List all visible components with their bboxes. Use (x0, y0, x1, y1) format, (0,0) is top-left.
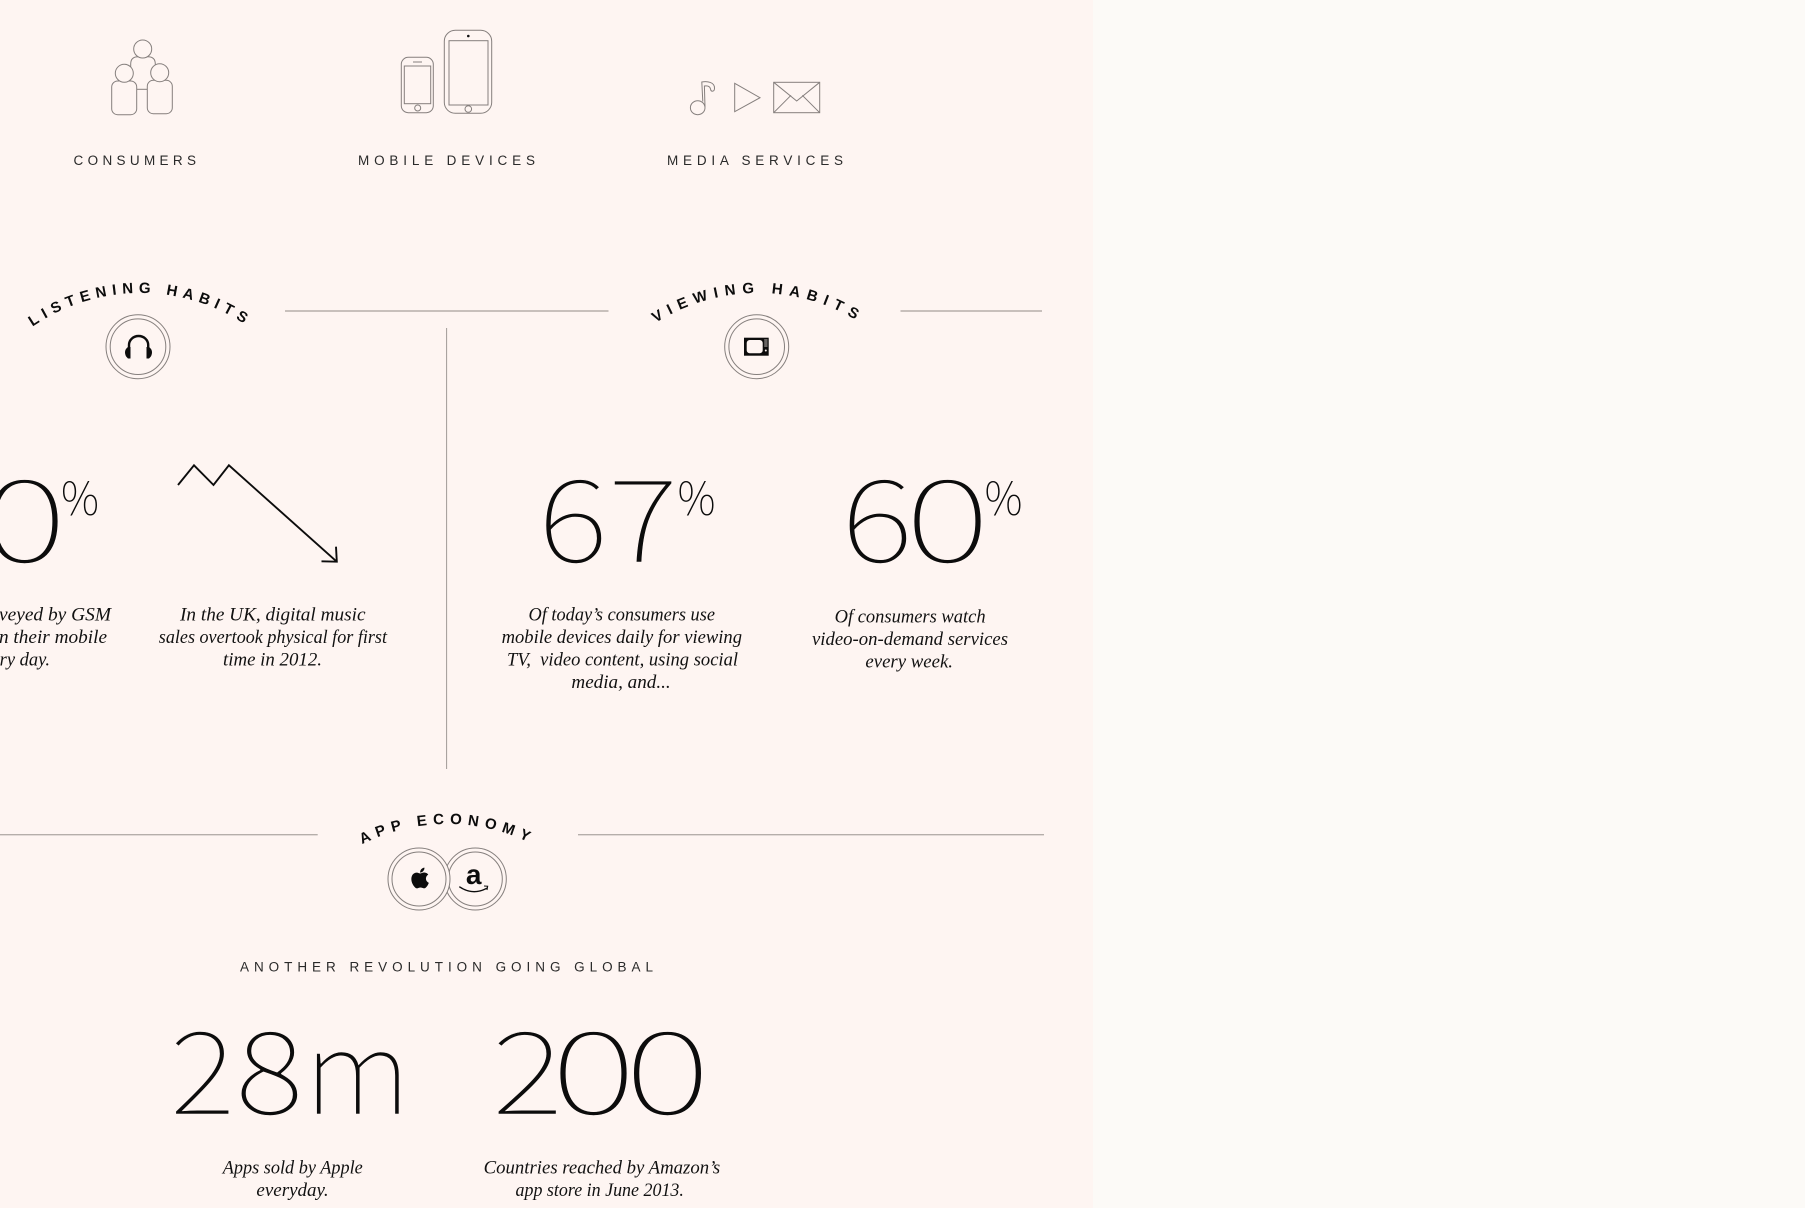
media services column (667, 82, 843, 168)
text: amazon app store description: Countries reached by Amazon’s (484, 1158, 720, 1178)
text: cropped GSM survey description: ry day. (0, 650, 50, 670)
text: apple apps description: Apps sold by Apple (221, 1158, 363, 1178)
stat: 200 countries (492, 982, 710, 1148)
icon: headphones badge (106, 315, 170, 379)
text: apple apps description (221, 1158, 363, 1201)
stat: 28m apps (170, 982, 411, 1148)
panel: right blank margin (1093, 0, 1805, 1208)
heading: app economy: APP ECONOMY (362, 814, 532, 844)
stat: 67 percent (538, 430, 716, 596)
text: UK digital music description: time in 2012. (223, 650, 322, 670)
stat: 60 percent (841, 430, 1022, 596)
stat: 200 countries: 0 (624, 982, 710, 1148)
text: daily mobile use description: TV, video content, using social (507, 650, 738, 670)
text: daily mobile use description (502, 606, 742, 693)
divider: listening to viewing (285, 310, 608, 312)
consumers column (74, 40, 196, 168)
text: daily mobile use description: Of today’s consumers use (528, 606, 715, 626)
section: listening habits (0, 282, 388, 670)
heading: listening habits: LISTENING HABITS (28, 282, 248, 326)
stat: 60 percent: 6 (841, 430, 913, 596)
chart: falling sales arrow (178, 465, 337, 562)
text: UK digital music description (159, 606, 388, 670)
label: mobile devices: MOBILE DEVICES (358, 153, 535, 168)
text: UK digital music description: In the UK, digital music (179, 606, 366, 626)
stat: partly cropped percentage (0, 430, 99, 596)
stat: 28m apps: m (304, 982, 411, 1148)
section: key players (74, 30, 843, 168)
icon: amazon badge (444, 848, 506, 910)
text: video on demand description: video-on-demand services (812, 630, 1008, 650)
divider: app economy left (0, 834, 318, 836)
text: cropped GSM survey description: veyed by GSM (0, 606, 113, 626)
stat: 200 countries: 0 (551, 982, 636, 1148)
section: viewing habits (502, 282, 1022, 693)
icon: consumers (112, 40, 172, 115)
text: UK digital music description: sales overtook physical for first (159, 628, 388, 648)
panel: pink background (0, 0, 1093, 1208)
text: daily mobile use description: mobile devices daily for viewing (502, 628, 742, 648)
text: cropped GSM survey description: n their mobile (0, 628, 107, 648)
divider: vertical centre (446, 328, 448, 769)
stat: 67 percent: % (678, 463, 716, 529)
divider: after viewing (900, 310, 1042, 312)
icon: amazon badge: a (466, 859, 482, 890)
stat: 28m apps: 2 (170, 982, 235, 1148)
subheading: another revolution: ANOTHER REVOLUTION GOING GLOBAL (240, 960, 653, 975)
section: app economy (170, 814, 720, 1201)
icon: phone and tablet (401, 30, 492, 113)
label: media services: MEDIA SERVICES (667, 153, 843, 168)
stat: 67 percent: 67 (538, 430, 678, 596)
text: video on demand description: Of consumers watch (835, 608, 986, 628)
icon: music, play and mail (690, 82, 820, 115)
stat: 60 percent: % (984, 463, 1022, 529)
stat: partly cropped percentage: % (61, 463, 99, 529)
text: apple apps description: everyday. (256, 1181, 329, 1201)
stat: 60 percent: 0 (905, 430, 990, 596)
text: video on demand description (812, 608, 1008, 672)
icon: television badge (725, 315, 789, 379)
stat: 200 countries: 2 (492, 982, 563, 1148)
text: video on demand description: every week. (865, 652, 953, 672)
label: consumers: CONSUMERS (74, 153, 196, 168)
text: cropped GSM survey description (0, 606, 113, 670)
divider: app economy right (578, 834, 1044, 836)
heading: viewing habits: VIEWING HABITS (650, 282, 859, 321)
text: daily mobile use description: media, and... (571, 673, 671, 693)
icon: apple badge (388, 848, 450, 910)
text: amazon app store description: app store in June 2013. (516, 1181, 684, 1201)
mobile devices column (358, 30, 535, 168)
text: amazon app store description (484, 1158, 720, 1201)
stat: 28m apps: 8 (236, 982, 304, 1148)
